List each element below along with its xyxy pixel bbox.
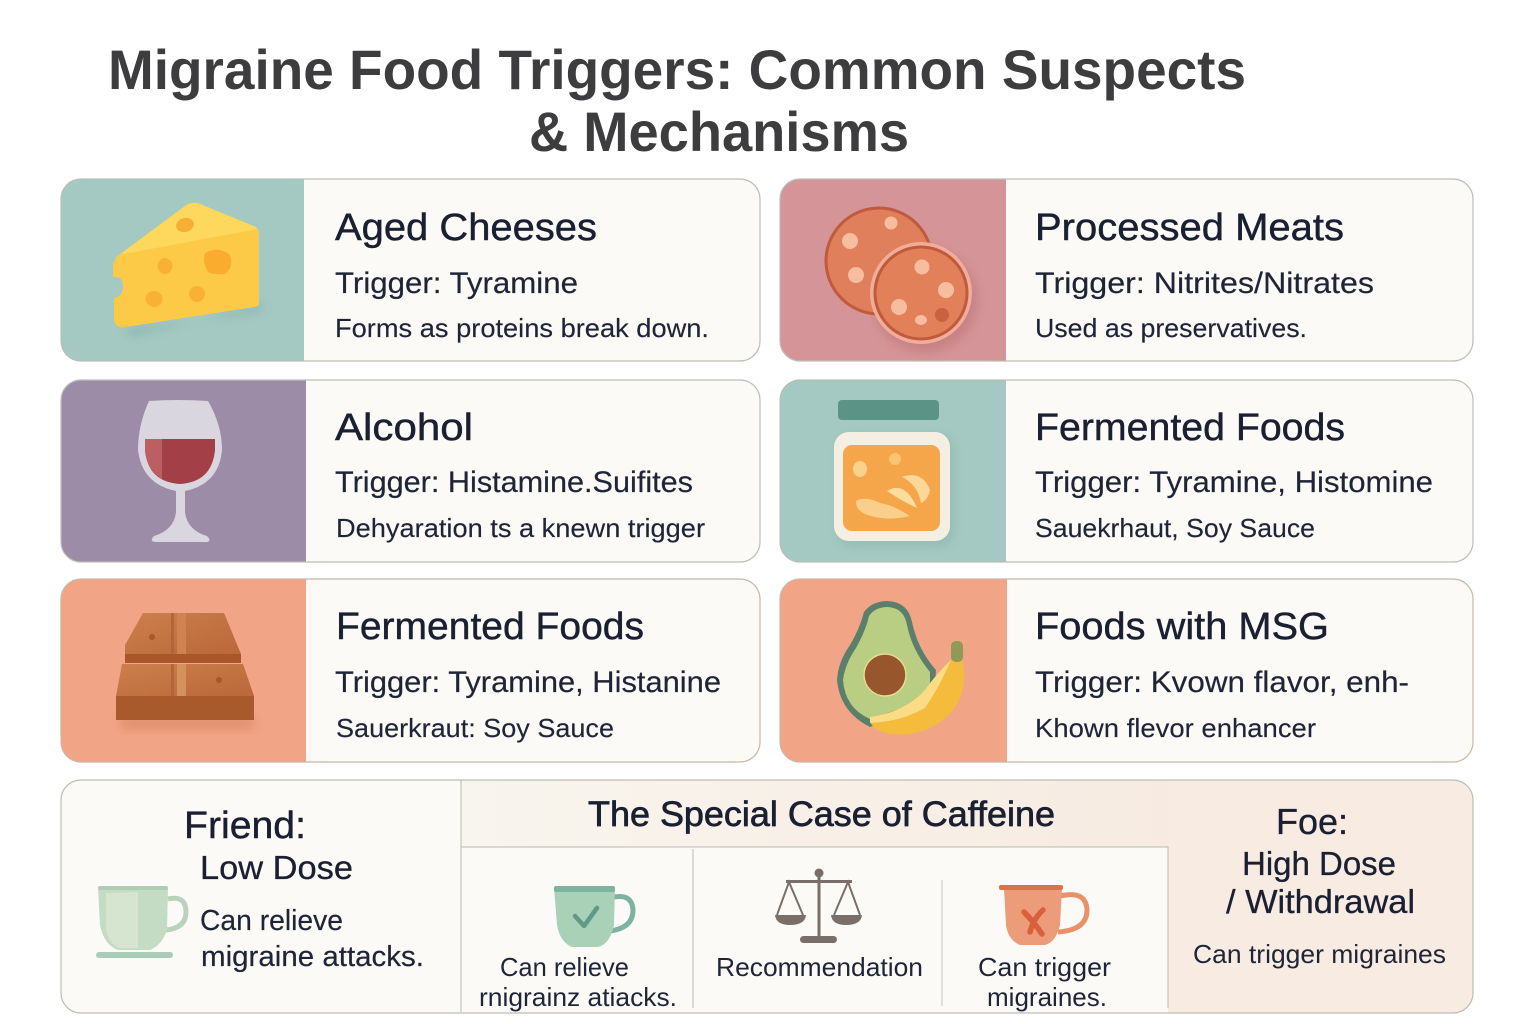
foe column: Foe:	[1276, 801, 1348, 842]
foe column: / Withdrawal	[1226, 883, 1415, 920]
friend column: Can relieve	[200, 905, 343, 937]
text: aged cheeses: Trigger: Tyramine	[335, 267, 578, 300]
panel: aged cheeses	[61, 179, 760, 361]
text: alcohol: Trigger: Histamine.Suifites	[335, 466, 693, 499]
title: Migraine Food Triggers: Common Suspects	[108, 38, 1246, 101]
text: fermented foods chocolate: Trigger: Tyramine, Histanine	[335, 666, 721, 699]
icon: friend cup	[96, 886, 186, 958]
text: fermented foods jar	[1035, 407, 1433, 543]
column: relieve: Can relieve	[500, 952, 629, 982]
icon: chocolate bar	[116, 613, 254, 730]
text: fermented foods jar: Sauekrhaut, Soy Sauce	[1035, 513, 1315, 543]
friend column: Friend:	[184, 805, 306, 847]
friend column: Low Dose	[200, 849, 353, 886]
text: alcohol	[335, 407, 705, 543]
text: fermented foods jar: Trigger: Tyramine, Histomine	[1035, 466, 1433, 499]
text: fermented foods jar: Fermented Foods	[1035, 407, 1345, 449]
icon: avocado and banana	[837, 601, 964, 735]
text: processed meats	[1035, 207, 1374, 343]
text: foods with msg: Foods with MSG	[1035, 606, 1329, 648]
text: processed meats: Used as preservatives.	[1035, 313, 1307, 343]
text: foods with msg: Khown flevor enhancer	[1035, 713, 1316, 743]
panel: alcohol	[61, 380, 760, 562]
icon: wine glass	[138, 400, 222, 542]
icon: green mug with check	[554, 886, 633, 947]
text: processed meats: Processed Meats	[1035, 207, 1344, 249]
text: foods with msg	[1035, 606, 1409, 743]
text: fermented foods chocolate: Sauerkraut: Soy Sauce	[336, 713, 614, 743]
text: processed meats: Trigger: Nitrites/Nitrates	[1035, 267, 1374, 300]
column: trigger: migraines.	[987, 982, 1107, 1012]
friend column	[96, 805, 424, 973]
panel: fermented foods jar	[780, 380, 1473, 562]
text: aged cheeses: Aged Cheeses	[335, 207, 597, 249]
title: & Mechanisms	[529, 100, 909, 163]
foe column: High Dose	[1242, 845, 1396, 882]
heading: caffeine: The Special Case of Caffeine	[588, 795, 1055, 834]
panel: processed meats	[780, 179, 1473, 361]
friend column: migraine attacks.	[201, 941, 424, 973]
column: recommendation: Recommendation	[716, 952, 923, 982]
text: aged cheeses	[335, 207, 709, 343]
text: alcohol: Alcohol	[335, 407, 473, 449]
panel: fermented foods chocolate	[61, 579, 760, 762]
text: fermented foods chocolate	[335, 606, 721, 743]
text: foods with msg: Trigger: Kvown flavor, enh-	[1035, 666, 1409, 699]
text: aged cheeses: Forms as proteins break down.	[335, 313, 709, 343]
column: trigger	[978, 885, 1111, 1012]
panel: special case of caffeine	[61, 780, 1473, 1013]
panel: foods with msg	[780, 579, 1473, 762]
foe column: Can trigger migraines	[1193, 939, 1446, 969]
icon: balance scale	[775, 868, 862, 943]
icon: orange mug with x	[999, 885, 1087, 945]
column: recommendation	[716, 868, 923, 982]
column: trigger: Can trigger	[978, 952, 1111, 982]
text: fermented foods chocolate: Fermented Foods	[336, 606, 644, 648]
title	[108, 38, 1246, 163]
column: relieve	[479, 886, 677, 1012]
text: alcohol: Dehyaration ts a knewn trigger	[336, 513, 705, 543]
column: relieve: rnigrainz atiacks.	[479, 982, 677, 1012]
foe column	[1193, 801, 1446, 969]
icon: cheese	[113, 203, 266, 336]
icon: salami slices	[826, 208, 977, 352]
icon: jar	[834, 400, 954, 547]
